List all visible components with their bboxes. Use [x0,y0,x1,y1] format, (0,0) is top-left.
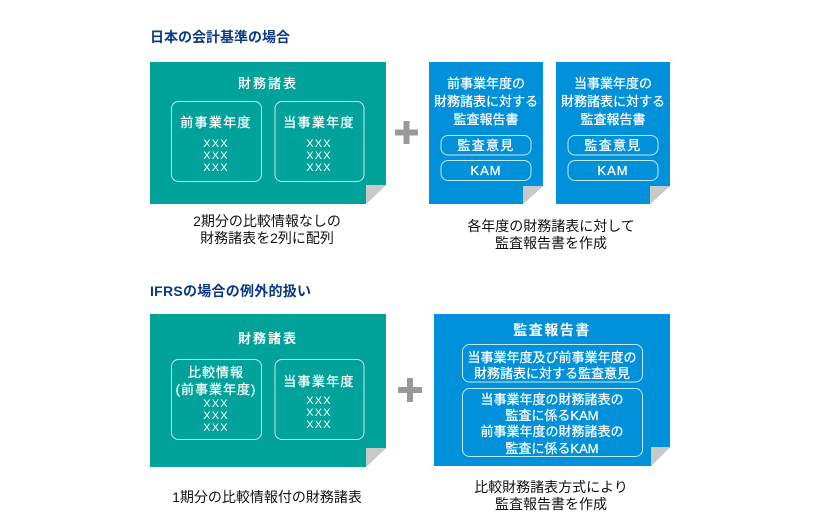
box: audit opinion [462,344,642,382]
box: comparative information: XXX [203,422,229,434]
box: current year: 当事業年度 [283,115,355,130]
pill: audit opinion [568,136,658,155]
box: comparative information: XXX [203,398,229,410]
panel: financial statements (IFRS): 財務諸表 [238,331,298,346]
box: comparative information: XXX [203,410,229,422]
box: current year [275,102,364,182]
pill: audit opinion: 監査意見 [457,138,515,153]
icon: plus (bottom) [398,378,422,402]
box: current year: XXX [306,395,332,407]
heading: IFRS: IFRSの場合の例外的扱い [150,283,311,299]
panel: current-year audit report [556,62,670,204]
box: current year: XXX [306,138,332,150]
heading: Japanese GAAP: 日本の会計基準の場合 [150,29,290,45]
panel: prior-year audit report: 前事業年度の [447,76,525,91]
panel: prior-year audit report: 監査報告書 [453,112,519,127]
pill: KAM [441,160,531,180]
caption: financial statements in two columns [193,213,341,246]
panel: financial statements (Japanese GAAP) [150,62,386,204]
pill: audit opinion: 監査意見 [584,138,642,153]
caption: financial statements in two columns: 2期分の比較情報なしの [193,213,341,229]
panel: prior-year audit report: 財務諸表に対する [434,94,538,109]
box: current year: 当事業年度 [283,374,355,389]
caption: audit report for each year: 監査報告書を作成 [495,235,607,251]
panel: current-year audit report: 当事業年度の [574,76,652,91]
caption: audit report for each year: 各年度の財務諸表に対して [467,218,635,234]
caption: financial statements in two columns: 財務諸表を2列に配列 [200,230,334,246]
pill: KAM: KAM [470,163,502,178]
panel: comparative audit report [434,314,670,466]
box: current year: XXX [306,150,332,162]
panel: comparative audit report: 監査報告書 [513,322,591,338]
pill: KAM [568,160,658,180]
caption: comparative method audit report: 比較財務諸表方式により [474,479,628,495]
caption: comparative method audit report: 監査報告書を作成 [495,496,607,512]
panel: financial statements (IFRS) [150,314,386,467]
box: current year [275,360,364,440]
box: audit opinion: 当事業年度及び前事業年度の [467,350,637,365]
box: current year: XXX [306,419,332,431]
box: comparative information [172,360,262,440]
box: prior year [172,102,262,182]
box: KAM [462,388,642,456]
box: KAM: 前事業年度の財務諸表の [480,424,624,439]
box: KAM: 監査に係るKAM [505,408,599,423]
box: prior year: XXX [203,162,229,174]
panel: current-year audit report: 監査報告書 [580,112,646,127]
caption: audit report for each year [467,218,635,251]
caption: one-period comparative statements: 1期分の比較情報付の財務諸表 [172,489,362,505]
icon: plus (top) [395,121,418,144]
box: KAM: 当事業年度の財務諸表の [480,392,624,407]
box: comparative information: (前事業年度) [176,382,256,397]
pill: audit opinion [441,136,531,155]
pill: KAM: KAM [597,163,629,178]
box: prior year: 前事業年度 [180,115,252,130]
box: current year: XXX [306,407,332,419]
box: audit opinion: 財務諸表に対する監査意見 [474,366,630,381]
panel: prior-year audit report [429,62,543,204]
box: comparative information: 比較情報 [188,365,244,380]
panel: current-year audit report: 財務諸表に対する [561,94,665,109]
caption: comparative method audit report [474,479,628,512]
box: current year: XXX [306,162,332,174]
box: prior year: XXX [203,138,229,150]
box: KAM: 監査に係るKAM [505,441,599,456]
box: prior year: XXX [203,150,229,162]
panel: financial statements (Japanese GAAP): 財務諸表 [238,76,298,91]
